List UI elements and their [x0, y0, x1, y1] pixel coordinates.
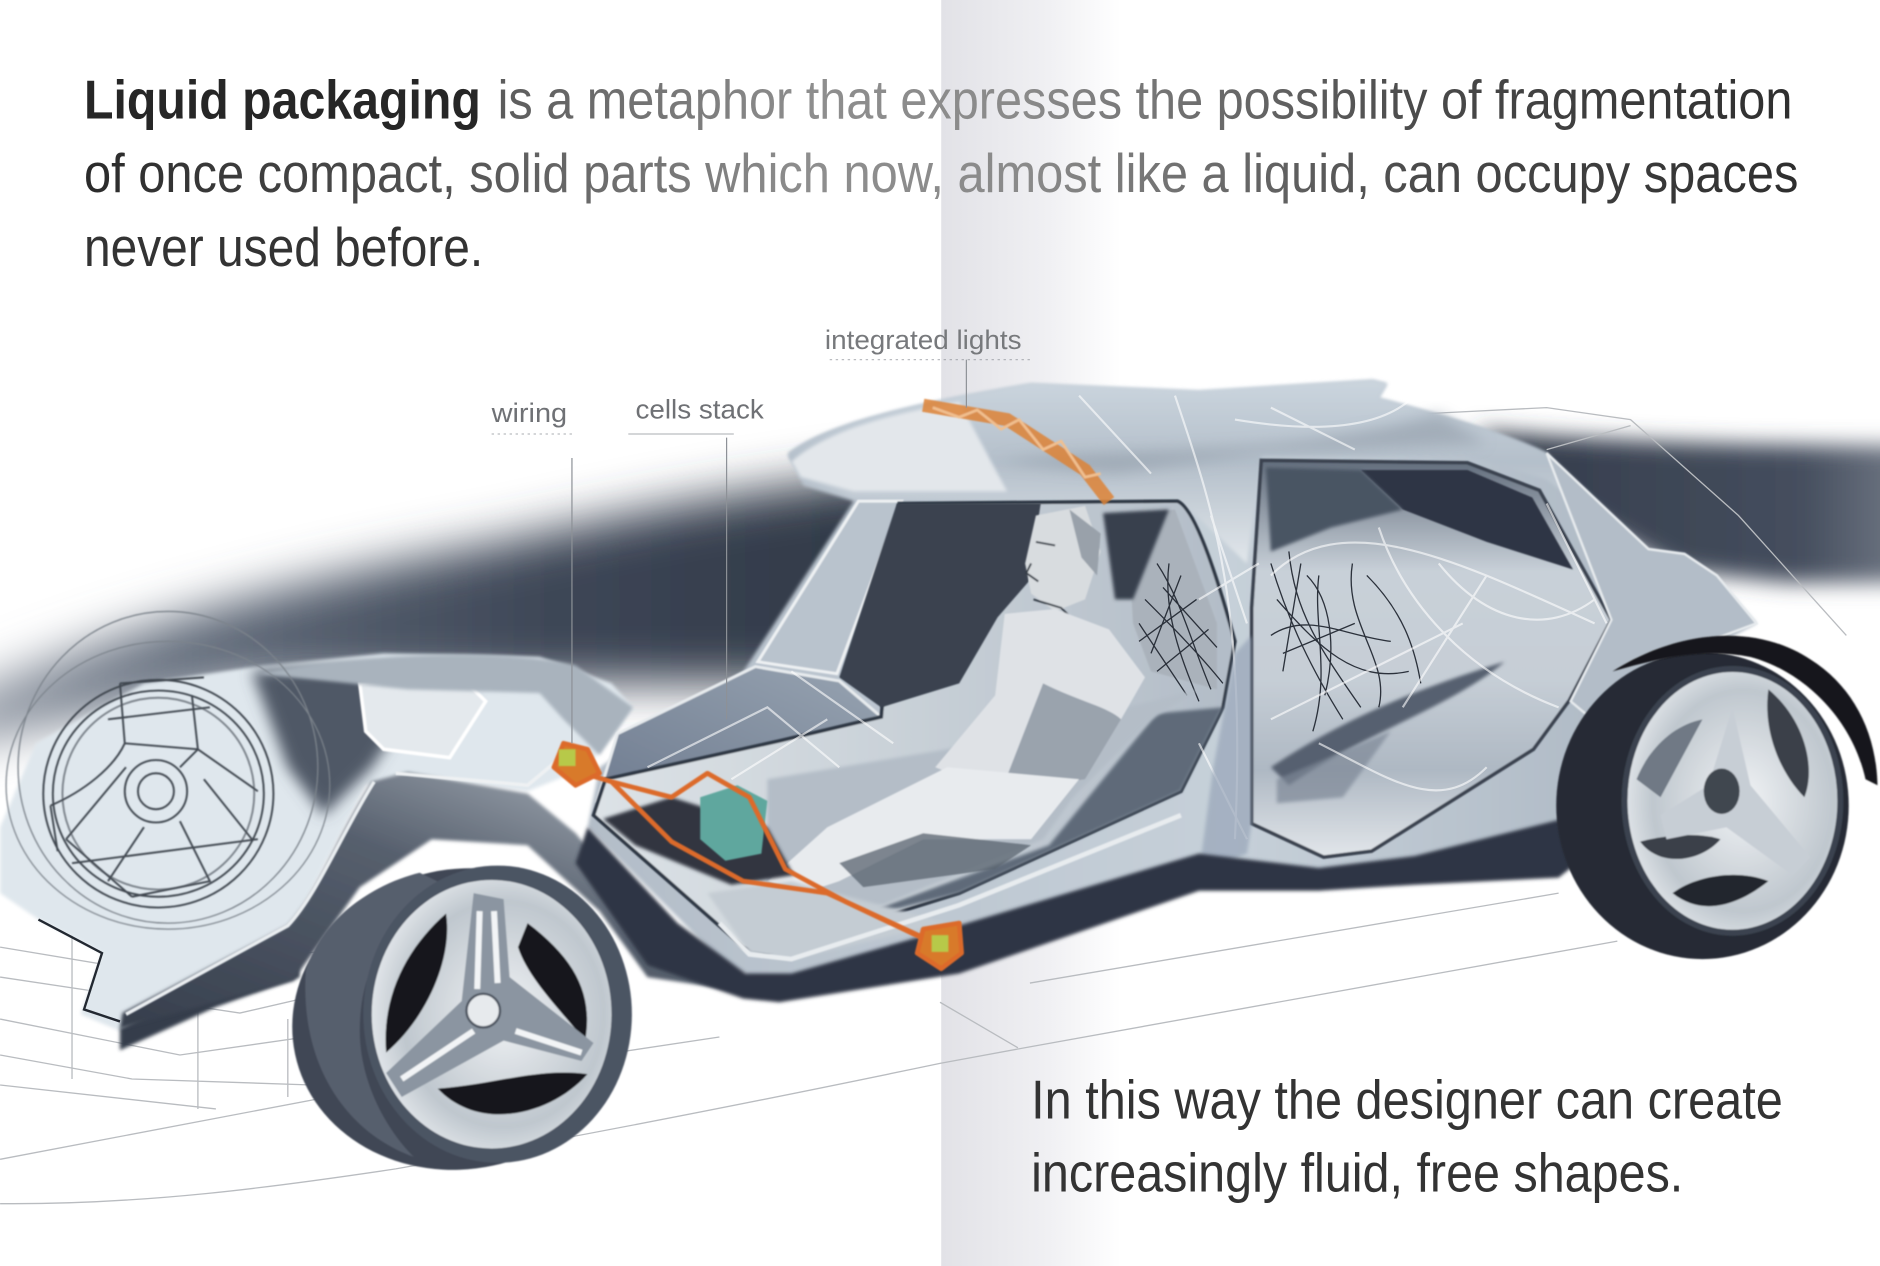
integrated lights: orange roof strut — [923, 405, 1109, 501]
front wheel — [264, 837, 659, 1201]
label: integrated lights: integrated lights — [825, 325, 1022, 355]
rim outer — [363, 866, 632, 1163]
closing statement: In this way the designer can create — [1031, 1069, 1783, 1131]
leader lines — [492, 360, 1031, 743]
underbody dark sill — [576, 820, 1607, 1002]
fender crease highlight — [126, 782, 374, 1014]
front body: pale panel behind wheel sketch — [0, 653, 633, 1031]
rear quarter panel — [1547, 453, 1756, 731]
structural web lines — [647, 396, 1607, 839]
wiring: orange strands — [554, 743, 962, 969]
sketched front wheel — [6, 611, 330, 929]
cells stack block — [700, 785, 767, 861]
label: cells stack: cells stack — [635, 394, 765, 424]
hub — [466, 994, 500, 1027]
main body shell — [588, 380, 1756, 995]
battery bay recess — [603, 797, 794, 885]
front side window dark — [839, 504, 1041, 707]
spoke highlights — [402, 911, 582, 1079]
roof left lip — [791, 402, 1007, 492]
tyre tread — [305, 873, 462, 1157]
driver torso — [935, 609, 1145, 791]
background shadow swoosh: right — [1475, 429, 1880, 583]
floor panel near door sill — [707, 881, 947, 959]
tyre — [264, 837, 659, 1201]
roof panel — [788, 380, 1595, 563]
label: wiring: wiring — [491, 398, 567, 428]
front pillar — [758, 501, 902, 674]
sill highlight — [719, 815, 1181, 959]
rear rim lip — [1625, 669, 1840, 933]
wire bundle behind driver — [1139, 563, 1223, 701]
front nose tip — [38, 920, 120, 1021]
rear opening — [1252, 460, 1611, 857]
rear seat streak — [1271, 662, 1505, 785]
intro paragraph: Liquid packaging — [84, 69, 481, 131]
hood dark sweep — [252, 667, 480, 815]
driver head — [1025, 506, 1101, 611]
seat shade — [1103, 510, 1169, 599]
rear spokes — [1661, 707, 1810, 875]
rim holes — [386, 914, 447, 1053]
cowl highlight — [396, 755, 564, 785]
rear hub — [1704, 768, 1740, 814]
rear upper-left shade — [1266, 468, 1403, 551]
centre fold band — [941, 0, 1121, 1266]
lap shadow — [839, 833, 1031, 887]
lower front glass — [597, 667, 881, 801]
closing statement: increasingly fluid, free shapes. — [1031, 1142, 1683, 1204]
rear seat lower shade — [1277, 731, 1391, 803]
closing statement — [1031, 1069, 1783, 1204]
ground construction lines — [0, 408, 1846, 1204]
hood top band — [258, 655, 633, 755]
hood highlight panel — [360, 677, 486, 758]
driver face — [1026, 542, 1077, 623]
driver legs — [767, 767, 1079, 893]
cabin opening — [594, 501, 1235, 953]
rear wire scribbles — [1271, 551, 1421, 731]
intro paragraph: never used before. — [84, 216, 483, 278]
rim lip — [372, 880, 612, 1149]
rear wheel — [1556, 652, 1849, 959]
centre pillar shade — [1199, 635, 1252, 873]
nose lower dark wedge — [120, 941, 300, 1050]
front fender and lower body — [120, 772, 767, 1029]
background shadow swoosh: left — [0, 470, 959, 749]
driver figure — [767, 506, 1145, 893]
rear rim holes — [1767, 689, 1809, 797]
rear side glass — [1127, 510, 1217, 689]
torso shadow — [1001, 683, 1121, 791]
seat base — [767, 689, 1199, 923]
rear fender arc — [1613, 636, 1878, 785]
spokes — [386, 893, 594, 1097]
cabin floor — [839, 707, 1223, 923]
driver hair — [1069, 510, 1101, 575]
intro paragraph — [84, 69, 1798, 278]
roof shading streak — [995, 414, 1487, 474]
rear tyre — [1556, 652, 1849, 959]
wiring nodes — [559, 749, 948, 952]
rear window dark — [1361, 470, 1573, 569]
